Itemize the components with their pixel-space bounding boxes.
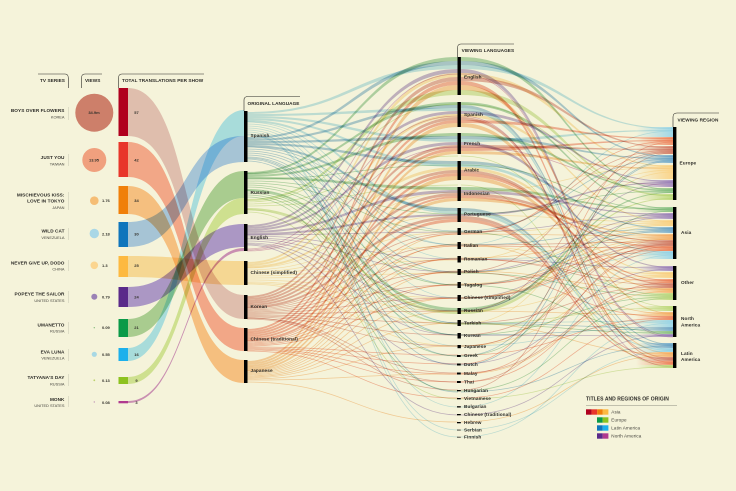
column header: viewing region: VIEWING REGION [678, 118, 719, 122]
viewing language bars and labels: Polish [464, 269, 479, 274]
ribbons: shows to original language [128, 88, 244, 403]
legend: titles and regions of origin: Asia [611, 410, 621, 414]
column header: original language: ORIGINAL LANGUAGE [248, 101, 299, 106]
viewing region bars and labels: Asia [681, 230, 692, 235]
region flows: Tatyana's Day [461, 90, 673, 399]
viewing language bars and labels: Tagalog [464, 282, 482, 288]
row: Wild Cat: VENEZUELA [41, 235, 65, 240]
row: Mischievous Kiss [17, 186, 139, 214]
row: Tatyana's Day: TATYANA'S DAY [27, 375, 65, 380]
viewing region bars and labels: Latin [681, 351, 693, 356]
region flows: Never Give Up, Dodo [461, 73, 673, 346]
viewing language bars and labels: German [464, 229, 482, 234]
flows: Popeye the Sailor titles [247, 69, 458, 415]
row: Mischievous Kiss: 1.76 [102, 198, 111, 203]
row: Eva Luna: 16 [134, 352, 139, 357]
viewing language bars and labels: Chinese (simplified) [464, 295, 511, 300]
column header: TV series: TV SERIES [40, 78, 65, 83]
flows: original language to viewing languages [247, 57, 458, 437]
original language bars and labels: Russian [250, 190, 269, 195]
column header: views: VIEWS [85, 78, 100, 83]
row: Popeye the Sailor [14, 287, 139, 307]
column header: original language [244, 96, 300, 111]
viewing language bars and labels: Bulgarian [464, 404, 487, 409]
legend: titles and regions of origin: TITLES AND REGIONS OF ORIGIN [586, 396, 669, 402]
viewing region bars and labels: America [681, 357, 700, 362]
row: Tatyana's Day: 0.13 [102, 378, 111, 383]
row: Just You: 42 [134, 158, 139, 162]
flows: Just You titles [247, 81, 458, 398]
viewing language bars and labels: Dutch [464, 362, 478, 367]
flows: Umanetto titles [247, 57, 458, 391]
row: Never Give Up, Dodo: NEVER GIVE UP, DODO [11, 260, 65, 265]
column header: viewing languages: VIEWING LANGUAGES [462, 48, 514, 53]
row: Monk: MONK [50, 397, 65, 402]
region flows: Mischievous Kiss [461, 85, 673, 422]
row: Never Give Up, Dodo: 1.3 [102, 263, 108, 268]
viewing region bars and labels: North [681, 316, 694, 321]
row: Never Give Up, Dodo [11, 256, 139, 277]
viewing language bars and labels: Greek [464, 353, 478, 358]
row: Umanetto: UMANETTO [38, 322, 65, 328]
row: Wild Cat [41, 222, 139, 247]
row: Never Give Up, Dodo: CHINA [52, 266, 65, 272]
viewing language bars and labels: Russian [464, 308, 483, 313]
row: Boys Over Flowers [11, 88, 139, 136]
original language bars and labels: Chinese (simplified) [250, 270, 297, 275]
column header: total translations [118, 74, 204, 88]
viewing region bars and labels: Europe [680, 160, 697, 166]
viewing language bars and labels: Romanian [464, 256, 487, 262]
region flows: Eva Luna [461, 65, 673, 437]
legend: titles and regions of origin [586, 396, 677, 439]
row: Umanetto [38, 319, 139, 337]
row: Tatyana's Day: RUSSIA [50, 382, 65, 386]
legend: titles and regions of origin: Europe [611, 418, 627, 422]
column header: viewing region [673, 113, 719, 127]
row: Mischievous Kiss: MISCHIEVOUS KISS: [17, 192, 65, 197]
viewing language bars and labels: Finnish [464, 434, 481, 440]
row: Popeye the Sailor: POPEYE THE SAILOR [14, 292, 65, 296]
original language bars and labels: Chinese (traditional) [250, 336, 298, 342]
flows: Monk titles [247, 74, 458, 251]
region flows: Boys Over Flowers [461, 77, 673, 390]
viewing language bars and labels: Indonesian [464, 191, 490, 196]
original language bars and labels: Spanish [250, 133, 269, 138]
row: Eva Luna: VENEZUELA [41, 356, 65, 360]
flows: Mischievous Kiss titles [247, 85, 458, 422]
viewing language bars and labels: Arabic [464, 168, 479, 172]
row: Eva Luna: 0.55 [102, 352, 111, 357]
row: Popeye the Sailor: 0.79 [102, 294, 111, 300]
row: Boys Over Flowers: 34.9m [88, 110, 100, 115]
viewing language bars and labels: French [464, 141, 480, 146]
original language bars and labels: Korean [250, 304, 267, 309]
row: Monk: 3 [135, 400, 138, 405]
viewing language bars and labels: Korean [464, 333, 481, 338]
row: Umanetto: 0.09 [102, 325, 111, 330]
region flows: Just You [461, 81, 673, 398]
row: Tatyana's Day [27, 374, 138, 386]
row: Popeye the Sailor: UNITED STATES [34, 298, 65, 303]
flows: Eva Luna titles [247, 65, 458, 437]
row: Popeye the Sailor: 24 [134, 294, 139, 300]
original language bars and labels: English [250, 235, 268, 240]
row: Wild Cat: 2.18 [102, 232, 111, 236]
row: Mischievous Kiss: 34 [134, 198, 139, 203]
row: Just You: JUST YOU [41, 155, 65, 160]
row: Mischievous Kiss: LOVE IN TOKYO [27, 198, 65, 204]
column header: viewing languages [458, 44, 514, 57]
flows: Wild Cat titles [247, 61, 458, 392]
row: Just You: TAIWAN [50, 162, 65, 166]
viewing language bars and labels: Spanish [464, 112, 483, 117]
flows: Boys Over Flowers titles [247, 77, 458, 390]
original language bars and labels: Japanese [250, 368, 273, 373]
row: Monk: 0.08 [102, 400, 111, 405]
viewing language bars and labels: Hungarian [464, 388, 488, 393]
viewing language bars and labels: Serbian [464, 428, 482, 432]
region band ends [636, 127, 673, 368]
row: Just You: 13.95 [89, 158, 100, 162]
viewing language bars and labels: Italian [464, 243, 478, 248]
region flows: Monk [461, 74, 673, 367]
flows: Tatyana's Day titles [247, 90, 458, 399]
region flows: Popeye the Sailor [461, 69, 673, 415]
column header: TV series [38, 74, 68, 88]
viewing language bars and labels: Thai [464, 380, 474, 384]
viewing language bars and labels: Japanese [464, 344, 486, 349]
row: Never Give Up, Dodo: 25 [134, 263, 139, 268]
row: Monk [34, 396, 138, 408]
region flows: Umanetto [461, 57, 673, 391]
row: Mischievous Kiss: JAPAN [52, 205, 65, 210]
legend: titles and regions of origin: North America [611, 434, 642, 438]
column header: views [82, 74, 102, 88]
row: Umanetto: RUSSIA [50, 328, 65, 334]
original language bars and labels [244, 111, 298, 383]
viewing language bars and labels: Portuguese [464, 212, 491, 216]
row: Boys Over Flowers: 57 [134, 110, 139, 115]
flows: viewing languages to viewing regions [461, 57, 673, 437]
row: Wild Cat: 30 [134, 232, 139, 236]
viewing language bars and labels: Hebrew [464, 420, 482, 425]
row: Eva Luna: EVA LUNA [41, 350, 65, 354]
viewing language bars and labels: Vietnamese [464, 396, 491, 401]
viewing language bars and labels: Turkish [464, 320, 481, 326]
row: Tatyana's Day: 9 [135, 378, 138, 383]
viewing region bars and labels [673, 127, 700, 368]
viewing language bars and labels: Chinese (traditional) [464, 412, 512, 417]
row: Just You [41, 142, 139, 177]
viewing language bars and labels: English [464, 74, 482, 80]
row: Boys Over Flowers: BOYS OVER FLOWERS [11, 108, 64, 113]
column header: total translations: TOTAL TRANSLATIONS PER SHOW [122, 78, 204, 83]
row: Eva Luna [41, 348, 139, 361]
viewing region bars and labels: Other [681, 280, 694, 285]
row: Boys Over Flowers: KOREA [51, 114, 65, 120]
legend: titles and regions of origin: Latin America [611, 426, 641, 430]
viewing language bars and labels [457, 57, 512, 440]
viewing region bars and labels: America [681, 322, 700, 328]
viewing language bars and labels: Malay [464, 371, 478, 376]
region flows: Wild Cat [461, 61, 673, 392]
row: Monk: UNITED STATES [34, 403, 65, 408]
row: Umanetto: 21 [134, 325, 139, 330]
flows: Never Give Up, Dodo titles [247, 73, 458, 346]
row: Wild Cat: WILD CAT [41, 228, 65, 234]
